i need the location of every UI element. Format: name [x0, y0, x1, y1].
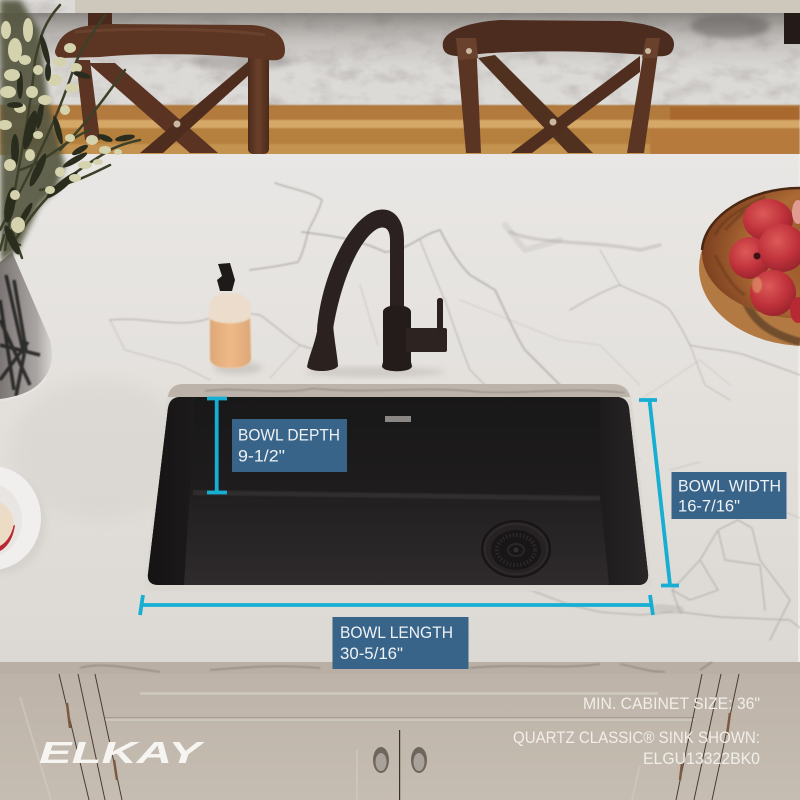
- dimension: bowl depth: 9-1/2": [238, 448, 285, 466]
- right chair: [443, 13, 800, 153]
- dimension: bowl width: 16-7/16": [678, 498, 740, 516]
- counter front edge: [0, 662, 800, 674]
- sink drain: [482, 521, 550, 577]
- faucet: [305, 210, 447, 377]
- rug background: [0, 0, 800, 107]
- cabinets: [0, 674, 800, 800]
- dimension: bowl depth: [207, 398, 347, 493]
- apples: [729, 199, 800, 323]
- left chair: [55, 13, 285, 154]
- logo: Elkay: ELKAY: [39, 735, 206, 770]
- plant foliage: [0, 0, 140, 262]
- note: sink model shown: [513, 729, 760, 768]
- faucet handle: [406, 298, 447, 352]
- vase: [0, 252, 52, 400]
- soap dispenser: [209, 263, 262, 374]
- faucet body: [382, 305, 412, 371]
- sink rim: [145, 384, 652, 591]
- sink basin: [148, 397, 648, 585]
- dimension: bowl length: [140, 595, 653, 669]
- note: sink model shown: QUARTZ CLASSIC® SINK SHOWN:: [513, 729, 760, 747]
- dimension: bowl width: [639, 400, 786, 586]
- basin ledge: [193, 490, 600, 501]
- table edge at top: [75, 0, 800, 13]
- note: sink model shown: ELGU13322BK0: [643, 750, 760, 768]
- dimension: bowl width: BOWL WIDTH: [678, 478, 781, 496]
- dimension: bowl depth: BOWL DEPTH: [238, 426, 340, 444]
- soap pump: [217, 263, 235, 291]
- marble veins: [110, 183, 800, 640]
- overflow plate: [385, 416, 411, 422]
- dimension: bowl length: BOWL LENGTH: [340, 624, 453, 642]
- cabinet knobs: [373, 747, 427, 773]
- plate with apple slice: [0, 466, 46, 574]
- wood floor: [0, 105, 800, 155]
- dimension: bowl length: 30-5/16": [340, 645, 403, 663]
- fruit bowl: [699, 187, 800, 346]
- note: minimum cabinet size: MIN. CABINET SIZE: 36": [583, 695, 760, 713]
